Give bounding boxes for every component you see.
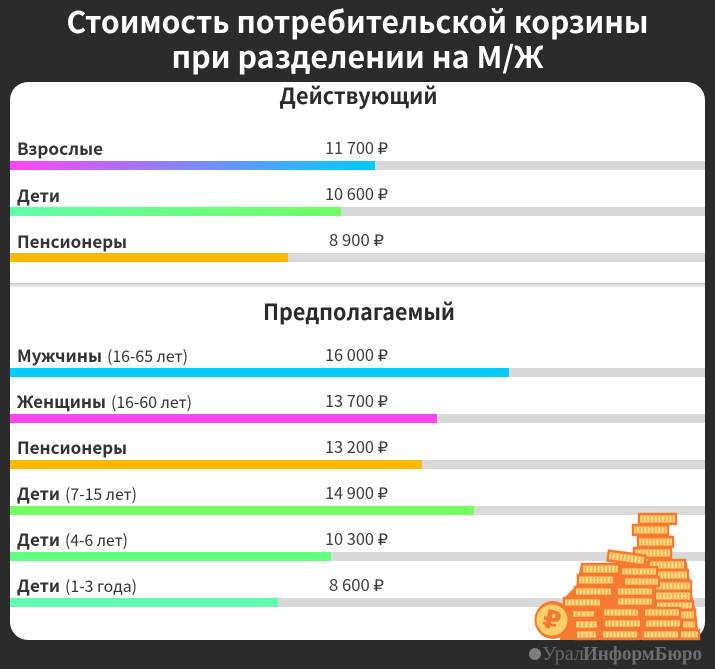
title: при разделении на М/Ж <box>172 33 544 77</box>
watermark: Урал <box>542 643 584 665</box>
row: adults <box>10 135 705 170</box>
heading: proposed: Предполагаемый <box>263 295 455 327</box>
row: pensioners: 13 200 ₽ <box>325 434 388 458</box>
row: men: (16-65 лет) <box>107 343 188 367</box>
row: children 4-6: 10 300 ₽ <box>325 526 388 550</box>
row: pensioners <box>10 227 705 262</box>
row: children 7-15 <box>10 480 705 515</box>
row: children: 10 600 ₽ <box>325 181 388 205</box>
row: men: Мужчины <box>17 342 102 367</box>
row: children 7-15: Дети <box>17 480 60 505</box>
row: children 1-3: Дети <box>17 572 60 597</box>
row: children 4-6: (4-6 лет) <box>65 527 128 551</box>
row: children 7-15: 14 900 ₽ <box>325 480 388 504</box>
row: pensioners: 8 900 ₽ <box>329 227 384 251</box>
watermark <box>529 643 702 665</box>
row: children 4-6 <box>10 526 705 561</box>
icon: rouble coin <box>534 601 572 639</box>
row: children 1-3: (1-3 года) <box>65 573 137 597</box>
title <box>66 0 649 77</box>
row: women: 13 700 ₽ <box>325 388 388 412</box>
row: men <box>10 342 705 377</box>
row: children <box>10 181 705 216</box>
icon: pile of coins <box>534 514 700 640</box>
row: women <box>10 388 705 423</box>
row: pensioners: Пенсионеры <box>17 228 127 253</box>
row: children 1-3: 8 600 ₽ <box>329 572 384 596</box>
heading: current: Действующий <box>280 79 438 111</box>
panel: proposed basket <box>10 295 705 607</box>
row: children: Дети <box>17 182 60 207</box>
panel: current basket <box>10 79 705 262</box>
row: children 4-6: Дети <box>17 526 60 551</box>
row: children 1-3 <box>10 572 705 607</box>
row: pensioners: Пенсионеры <box>17 434 127 459</box>
icon: rouble coin: ₽ <box>540 604 564 638</box>
row: women: Женщины <box>17 388 106 413</box>
row: pensioners <box>10 434 705 469</box>
row: men: 16 000 ₽ <box>325 342 388 366</box>
watermark: ИнформБюро <box>583 643 702 665</box>
row: adults: 11 700 ₽ <box>325 135 388 159</box>
row: women: (16-60 лет) <box>111 389 192 413</box>
row: children 7-15: (7-15 лет) <box>65 481 137 505</box>
row: adults: Взрослые <box>17 135 103 160</box>
